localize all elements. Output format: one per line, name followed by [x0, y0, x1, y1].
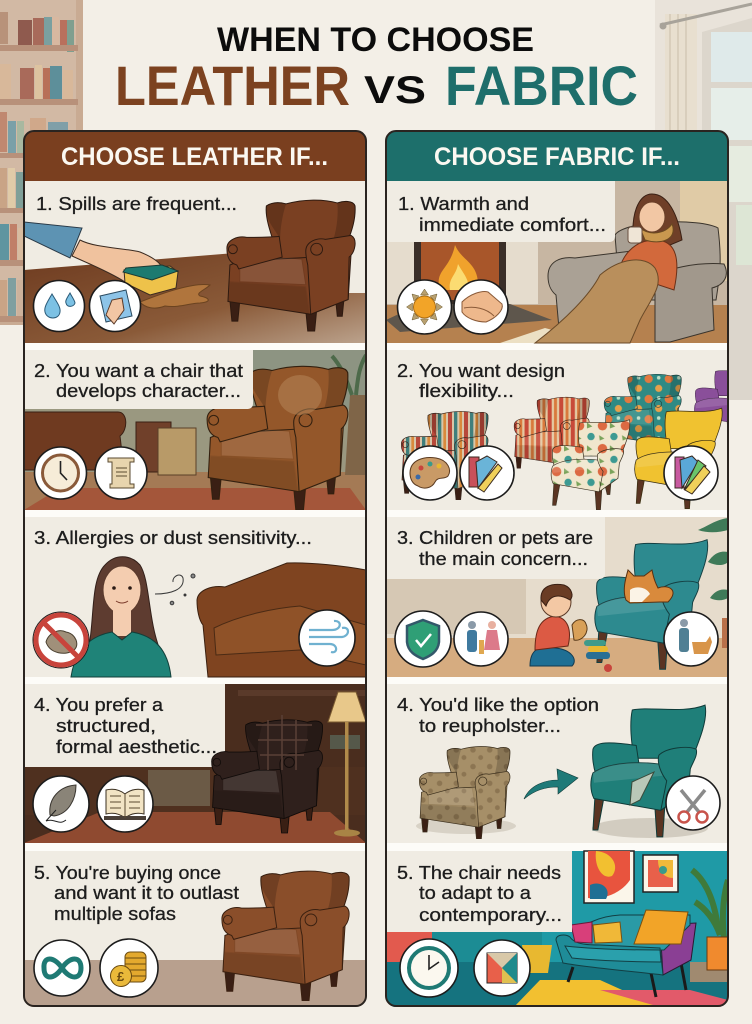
text: 2. You want a chair that [34, 360, 243, 381]
dust swirl [155, 574, 195, 605]
sofa [556, 910, 696, 997]
sponge [124, 266, 178, 295]
background: window and curtain [655, 0, 752, 400]
text [34, 360, 243, 401]
sofa [197, 563, 366, 677]
text [34, 862, 239, 924]
text: 4. You'd like the option [397, 694, 599, 715]
child playing [530, 584, 587, 666]
sleeve [24, 222, 82, 258]
chair: stripes middle [514, 397, 589, 474]
title line 1: WHEN TO CHOOSE [217, 21, 534, 59]
rug [514, 980, 660, 1007]
text: to adapt to a [419, 882, 532, 903]
icon: tangram [474, 940, 530, 996]
text: 3. Allergies or dust sensitivity... [34, 527, 312, 548]
icon: open book [97, 776, 153, 832]
text [34, 697, 216, 754]
text: formal aesthetic... [56, 736, 217, 757]
fabric item 3: children and pets [386, 517, 730, 677]
arrow [524, 769, 578, 799]
text: the main concern... [419, 548, 588, 569]
chair: yellow [635, 408, 722, 509]
title word: fabric: FABRIC [445, 54, 638, 117]
sofa in background [24, 412, 126, 470]
text: 1. Spills are frequent... [36, 193, 237, 214]
spill [140, 284, 210, 308]
background: bookshelf [0, 0, 83, 325]
chair: teal wing [591, 705, 706, 837]
icon: swatches colourful [664, 446, 718, 500]
icon: infinity [34, 940, 90, 996]
woman [71, 557, 171, 677]
icon: person and dog [664, 612, 718, 666]
leather item 3: allergies [24, 517, 366, 677]
icon: scroll [95, 447, 147, 499]
chair: teal [595, 540, 708, 669]
icon: folded blanket [454, 280, 508, 334]
fabric panel border [386, 131, 728, 1006]
text: and want it to outlast [54, 882, 239, 903]
text: to reupholster... [419, 715, 561, 736]
panel: choose fabric [386, 131, 752, 1007]
chair: worn floral [419, 746, 510, 839]
title word: vs: VS [364, 69, 426, 112]
leather item 1: spills [24, 181, 366, 343]
hand [72, 240, 161, 282]
leather item 5: investment [24, 851, 366, 1007]
fabric item 5: contemporary [386, 851, 729, 1007]
icon: swatches [460, 446, 514, 500]
chair: floral cream [551, 420, 630, 510]
fabric item 1: warmth [386, 181, 728, 343]
leather panel header: CHOOSE LEATHER IF... [61, 143, 328, 171]
fabric item 2: design flexibility [386, 350, 752, 510]
leather item 2: character [24, 350, 366, 510]
leather panel border [24, 131, 366, 1006]
text: 5. The chair needs [397, 862, 561, 883]
chair: tufted [212, 715, 323, 833]
plant stand [345, 395, 366, 475]
text: 3. Children or pets are [397, 527, 593, 548]
icon: palette [403, 446, 457, 500]
chair: grey armchair [548, 222, 726, 342]
abstract art [584, 851, 634, 903]
icon: family [454, 612, 508, 666]
text [398, 193, 606, 235]
text: 5. You're buying once [34, 862, 221, 883]
text box [386, 517, 605, 579]
bookshelf [148, 690, 366, 806]
chair: stripes left [401, 411, 488, 500]
text [397, 862, 562, 925]
fireplace [386, 242, 600, 343]
icon: shield [395, 611, 451, 667]
text: flexibility... [419, 380, 514, 401]
plant [692, 870, 728, 940]
leather item 4: formal [24, 684, 366, 843]
blanket [535, 260, 658, 343]
leather panel header [24, 131, 366, 181]
fabric panel header: CHOOSE FABRIC IF... [434, 143, 680, 171]
text: immediate comfort... [419, 214, 606, 235]
chair: brown leather [227, 200, 355, 331]
icon: sun [398, 280, 452, 334]
text: develops character... [56, 380, 241, 401]
fabric panel header [386, 131, 728, 181]
chair: floral teal [604, 374, 681, 453]
patina [278, 375, 322, 415]
text: 2. You want design [397, 360, 565, 381]
text box [24, 684, 225, 767]
icon: scissors [666, 776, 720, 830]
icon: modern clock [400, 939, 458, 997]
text box [24, 350, 253, 409]
icon: coins [100, 939, 158, 997]
icon: no dust [33, 612, 89, 668]
stacking rings [584, 640, 612, 672]
text: structured, [56, 715, 156, 736]
chair: aged leather [207, 366, 348, 510]
frames [136, 422, 196, 475]
icon: water drops [34, 280, 84, 332]
floor lamp [328, 692, 366, 836]
panel: choose leather [24, 131, 366, 1007]
title [115, 21, 638, 117]
text: 4. You prefer a [34, 694, 164, 715]
text [397, 360, 565, 401]
icon: quill [33, 776, 89, 832]
plant [698, 518, 728, 600]
text box [386, 181, 615, 242]
text [397, 694, 599, 736]
framed art small [643, 855, 678, 892]
text: multiple sofas [54, 903, 176, 924]
chair: tan leather [222, 871, 349, 1001]
small plant pot [522, 945, 552, 973]
icon: clock [34, 447, 86, 499]
icon: cloth and hand [90, 280, 140, 332]
text [397, 527, 593, 569]
text: contemporary... [419, 904, 562, 925]
chair: purple [694, 369, 752, 436]
cat [624, 570, 673, 603]
text: 1. Warmth and [398, 193, 529, 214]
text box [386, 851, 572, 932]
title word: leather: LEATHER [115, 54, 350, 117]
icon: coins: £ [117, 969, 125, 984]
icon: air [299, 610, 355, 666]
fabric item 4: reupholster [386, 684, 728, 843]
peeled fabric [630, 772, 654, 805]
woman with mug [617, 194, 682, 290]
orange pot [707, 937, 729, 970]
